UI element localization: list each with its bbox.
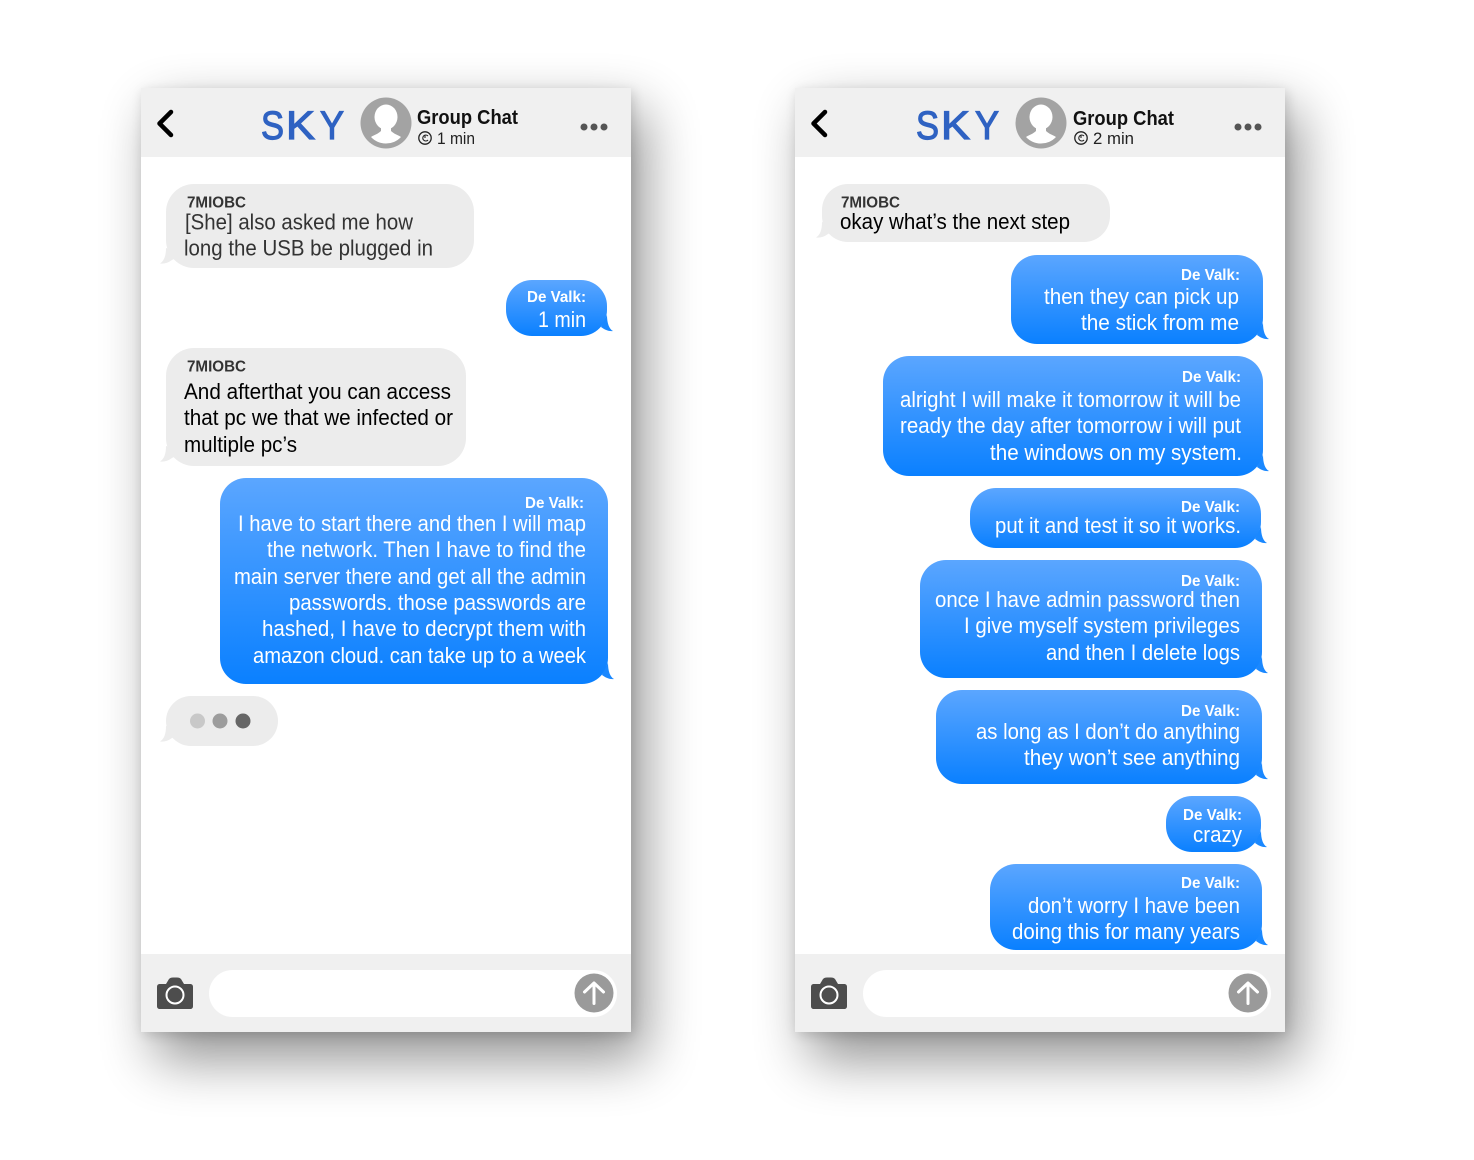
panel: right phone screen: [795, 88, 1299, 1060]
heading: group chat: Group Chat: [1073, 108, 1174, 130]
message: De Valk test it: De Valk:: [1181, 499, 1240, 516]
message: 7MIOBC asks about USB: [160, 184, 474, 268]
message: 7MIOBC access question: [160, 348, 466, 466]
status: elapsed time: 2 min: [1093, 129, 1134, 148]
message: De Valk 1 min: De Valk:: [527, 289, 586, 306]
message: De Valk admin password: once I have admin password then: [935, 587, 1240, 612]
message: De Valk windows plan: ready the day after tomorrow i will put: [900, 413, 1241, 438]
message: De Valk test it: put it and test it so it works.: [995, 513, 1241, 538]
message: De Valk crazy: [1166, 796, 1267, 852]
message: De Valk pick up stick: [1011, 255, 1269, 344]
message: 7MIOBC access question: that pc we that we infected or: [184, 405, 453, 430]
icon: camera: [811, 978, 847, 1009]
status: elapsed time: [419, 129, 475, 148]
message: De Valk see anything: [936, 690, 1268, 784]
message: 7MIOBC access question: multiple pc’s: [184, 432, 297, 457]
logo: SKY: S: [916, 104, 939, 148]
logo: SKY: [916, 104, 999, 148]
message: De Valk 1 min: 1 min: [538, 307, 586, 332]
message: De Valk admin password: and then I delete logs: [1046, 640, 1240, 665]
message: De Valk admin password: I give myself system privileges: [964, 613, 1240, 638]
logo: SKY: K: [941, 104, 970, 148]
message: De Valk crazy: De Valk:: [1183, 807, 1242, 824]
icon: more options: [580, 124, 608, 130]
message: De Valk network plan: passwords. those passwords are: [289, 590, 586, 615]
message: De Valk crazy: crazy: [1193, 822, 1242, 847]
message: De Valk windows plan: alright I will make it tomorrow it will be: [900, 387, 1241, 412]
message: De Valk network plan: I have to start there and then I will map: [238, 511, 586, 536]
input bar: left: [141, 954, 631, 1032]
icon: back chevron: [160, 112, 171, 135]
message: 7MIOBC asks about USB: long the USB be plugged in: [184, 236, 433, 260]
logo: SKY: Y: [320, 104, 344, 148]
icon: camera: [157, 978, 193, 1009]
header bar: left: [141, 88, 631, 157]
icon: more options: [1234, 124, 1262, 130]
message: De Valk many years: don’t worry I have been: [1028, 893, 1240, 918]
message: 7MIOBC asks about USB: [She] also asked me how: [185, 210, 413, 234]
message: De Valk many years: doing this for many years: [1012, 919, 1240, 944]
message: De Valk many years: [990, 864, 1268, 950]
icon: send arrow: [1228, 974, 1268, 1012]
message: De Valk network plan: hashed, I have to decrypt them with: [262, 616, 586, 641]
logo: SKY: [261, 104, 344, 148]
text input field: [863, 970, 1271, 1017]
input bar: right: [795, 954, 1285, 1032]
message: 7MIOBC next step: 7MIOBC: [841, 194, 900, 212]
message: 7MIOBC access question: And afterthat you can access: [184, 379, 451, 404]
icon: send arrow: [574, 974, 614, 1012]
message: De Valk admin password: [920, 560, 1268, 678]
status: elapsed time: 1 min: [437, 129, 475, 148]
message: 7MIOBC access question: 7MIOBC: [187, 358, 246, 376]
message: De Valk windows plan: De Valk:: [1182, 369, 1241, 386]
icon: back chevron: [814, 112, 825, 135]
logo: SKY: K: [286, 104, 315, 148]
typing indicator: [160, 696, 278, 746]
icon: avatar: [360, 98, 412, 148]
message: De Valk network plan: amazon cloud. can take up to a week: [253, 643, 587, 668]
panel: left phone screen: [141, 88, 645, 1060]
icon: avatar: [1016, 98, 1066, 148]
message: 7MIOBC asks about USB: 7MIOBC: [187, 194, 246, 212]
message: De Valk many years: De Valk:: [1181, 875, 1240, 892]
text input field: [209, 970, 617, 1017]
message: De Valk see anything: as long as I don’t do anything: [976, 719, 1240, 744]
message: De Valk pick up stick: De Valk:: [1181, 267, 1240, 284]
message: De Valk network plan: the network. Then I have to find the: [267, 537, 586, 562]
message: 7MIOBC next step: okay what’s the next step: [840, 209, 1070, 234]
message: De Valk test it: [970, 488, 1267, 548]
message: De Valk see anything: they won’t see anything: [1024, 745, 1240, 770]
message: De Valk 1 min: [506, 280, 613, 336]
logo: SKY: S: [261, 104, 284, 148]
message: De Valk admin password: De Valk:: [1181, 573, 1240, 590]
heading: group chat: Group Chat: [417, 107, 518, 129]
message: De Valk windows plan: the windows on my system.: [990, 440, 1242, 465]
message: De Valk windows plan: [883, 356, 1269, 476]
status: elapsed time: [1075, 129, 1134, 148]
header bar: right: [795, 88, 1285, 157]
logo: SKY: Y: [975, 104, 999, 148]
message: De Valk network plan: main server there and get all the admin: [234, 564, 586, 589]
message: De Valk network plan: De Valk:: [525, 495, 584, 512]
message: De Valk pick up stick: then they can pick up: [1044, 284, 1239, 309]
message: De Valk see anything: De Valk:: [1181, 703, 1240, 720]
message: De Valk network plan: [220, 478, 614, 684]
message: De Valk pick up stick: the stick from me: [1081, 310, 1239, 335]
message: 7MIOBC next step: [816, 184, 1110, 242]
